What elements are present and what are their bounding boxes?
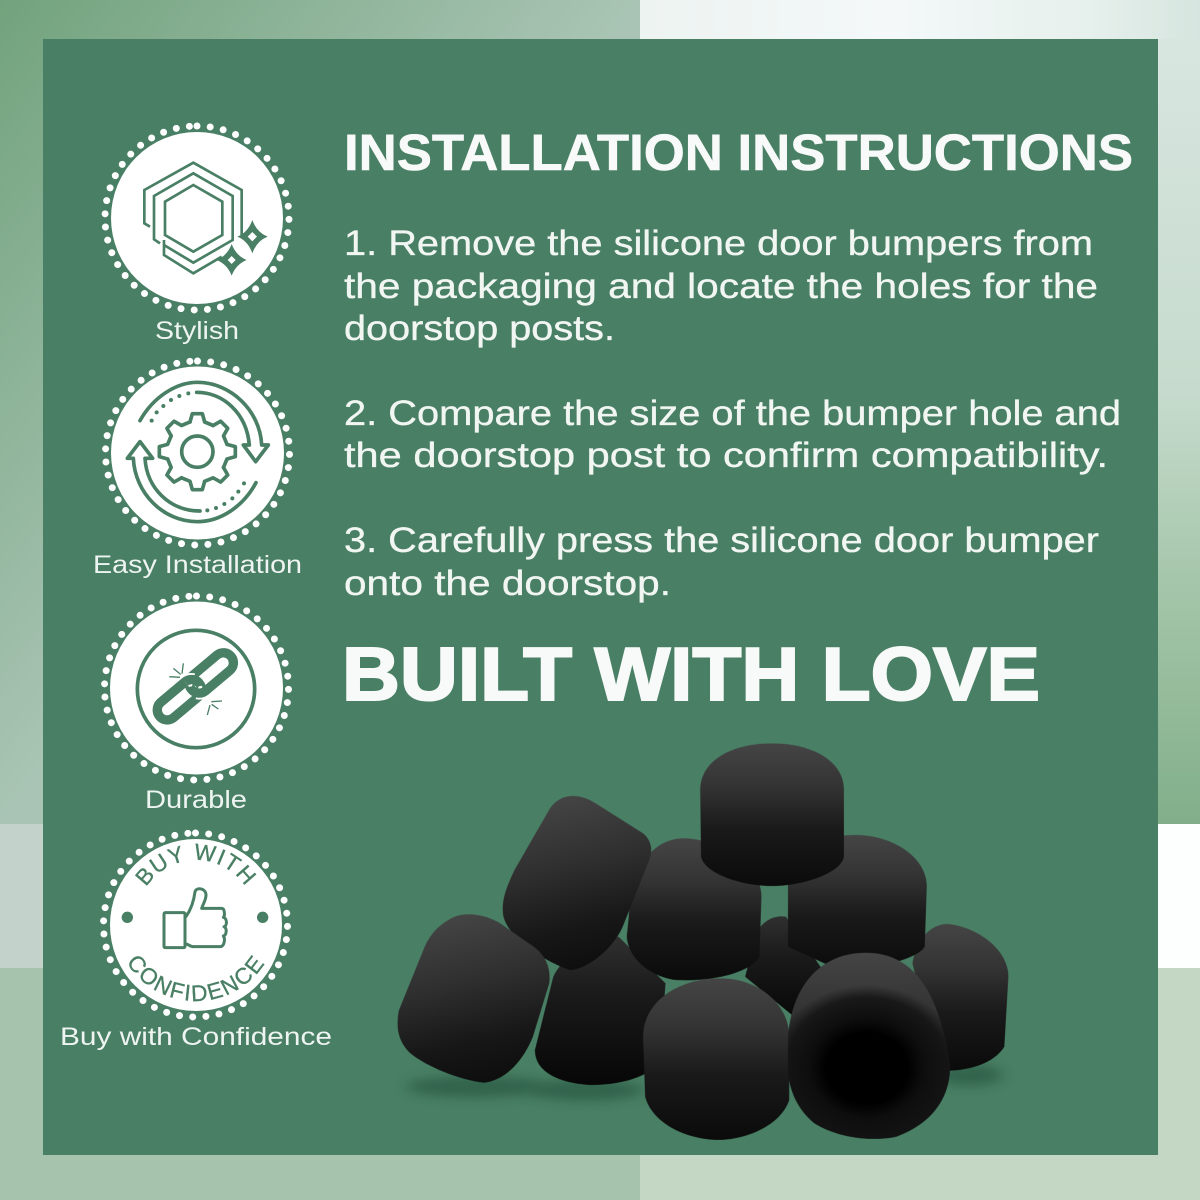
icon: buy with confidence badge — [100, 830, 291, 1020]
heading: built with love: BUILT WITH LOVE — [342, 632, 1040, 716]
label: Durable: Durable — [145, 786, 247, 814]
step 2 text: 2. Compare the size of the bumper hole and — [344, 394, 1121, 433]
icon: buy with confidence badge: CONFIDENCE — [129, 955, 264, 1002]
step 3 text: 3. Carefully press the silicone door bumper — [344, 521, 1099, 560]
step 2 text — [344, 394, 1121, 475]
step 3 text: onto the doorstop. — [344, 564, 671, 603]
product photo: pile of black silicone door bumpers — [397, 743, 1008, 1152]
label: Buy with Confidence: Buy with Confidence — [60, 1023, 332, 1051]
heading: installation instructions: INSTALLATION INSTRUCTIONS — [344, 124, 1133, 181]
step 1 text — [344, 224, 1098, 348]
step 2 text: the doorstop post to confirm compatibility. — [344, 436, 1108, 475]
icon: stylish hexagon — [105, 126, 289, 310]
step 1 text: 1. Remove the silicone door bumpers from — [344, 224, 1093, 263]
step 1 text: doorstop posts. — [344, 309, 615, 348]
icon: buy with confidence badge: BUY WITH — [134, 843, 256, 886]
label: Easy Installation: Easy Installation — [93, 551, 302, 579]
label: Stylish: Stylish — [155, 317, 239, 345]
step 1 text: the packaging and locate the holes for the — [344, 267, 1098, 306]
icon: easy installation gear — [106, 361, 290, 545]
step 3 text — [344, 521, 1099, 603]
icon: durable chain link — [104, 596, 288, 780]
